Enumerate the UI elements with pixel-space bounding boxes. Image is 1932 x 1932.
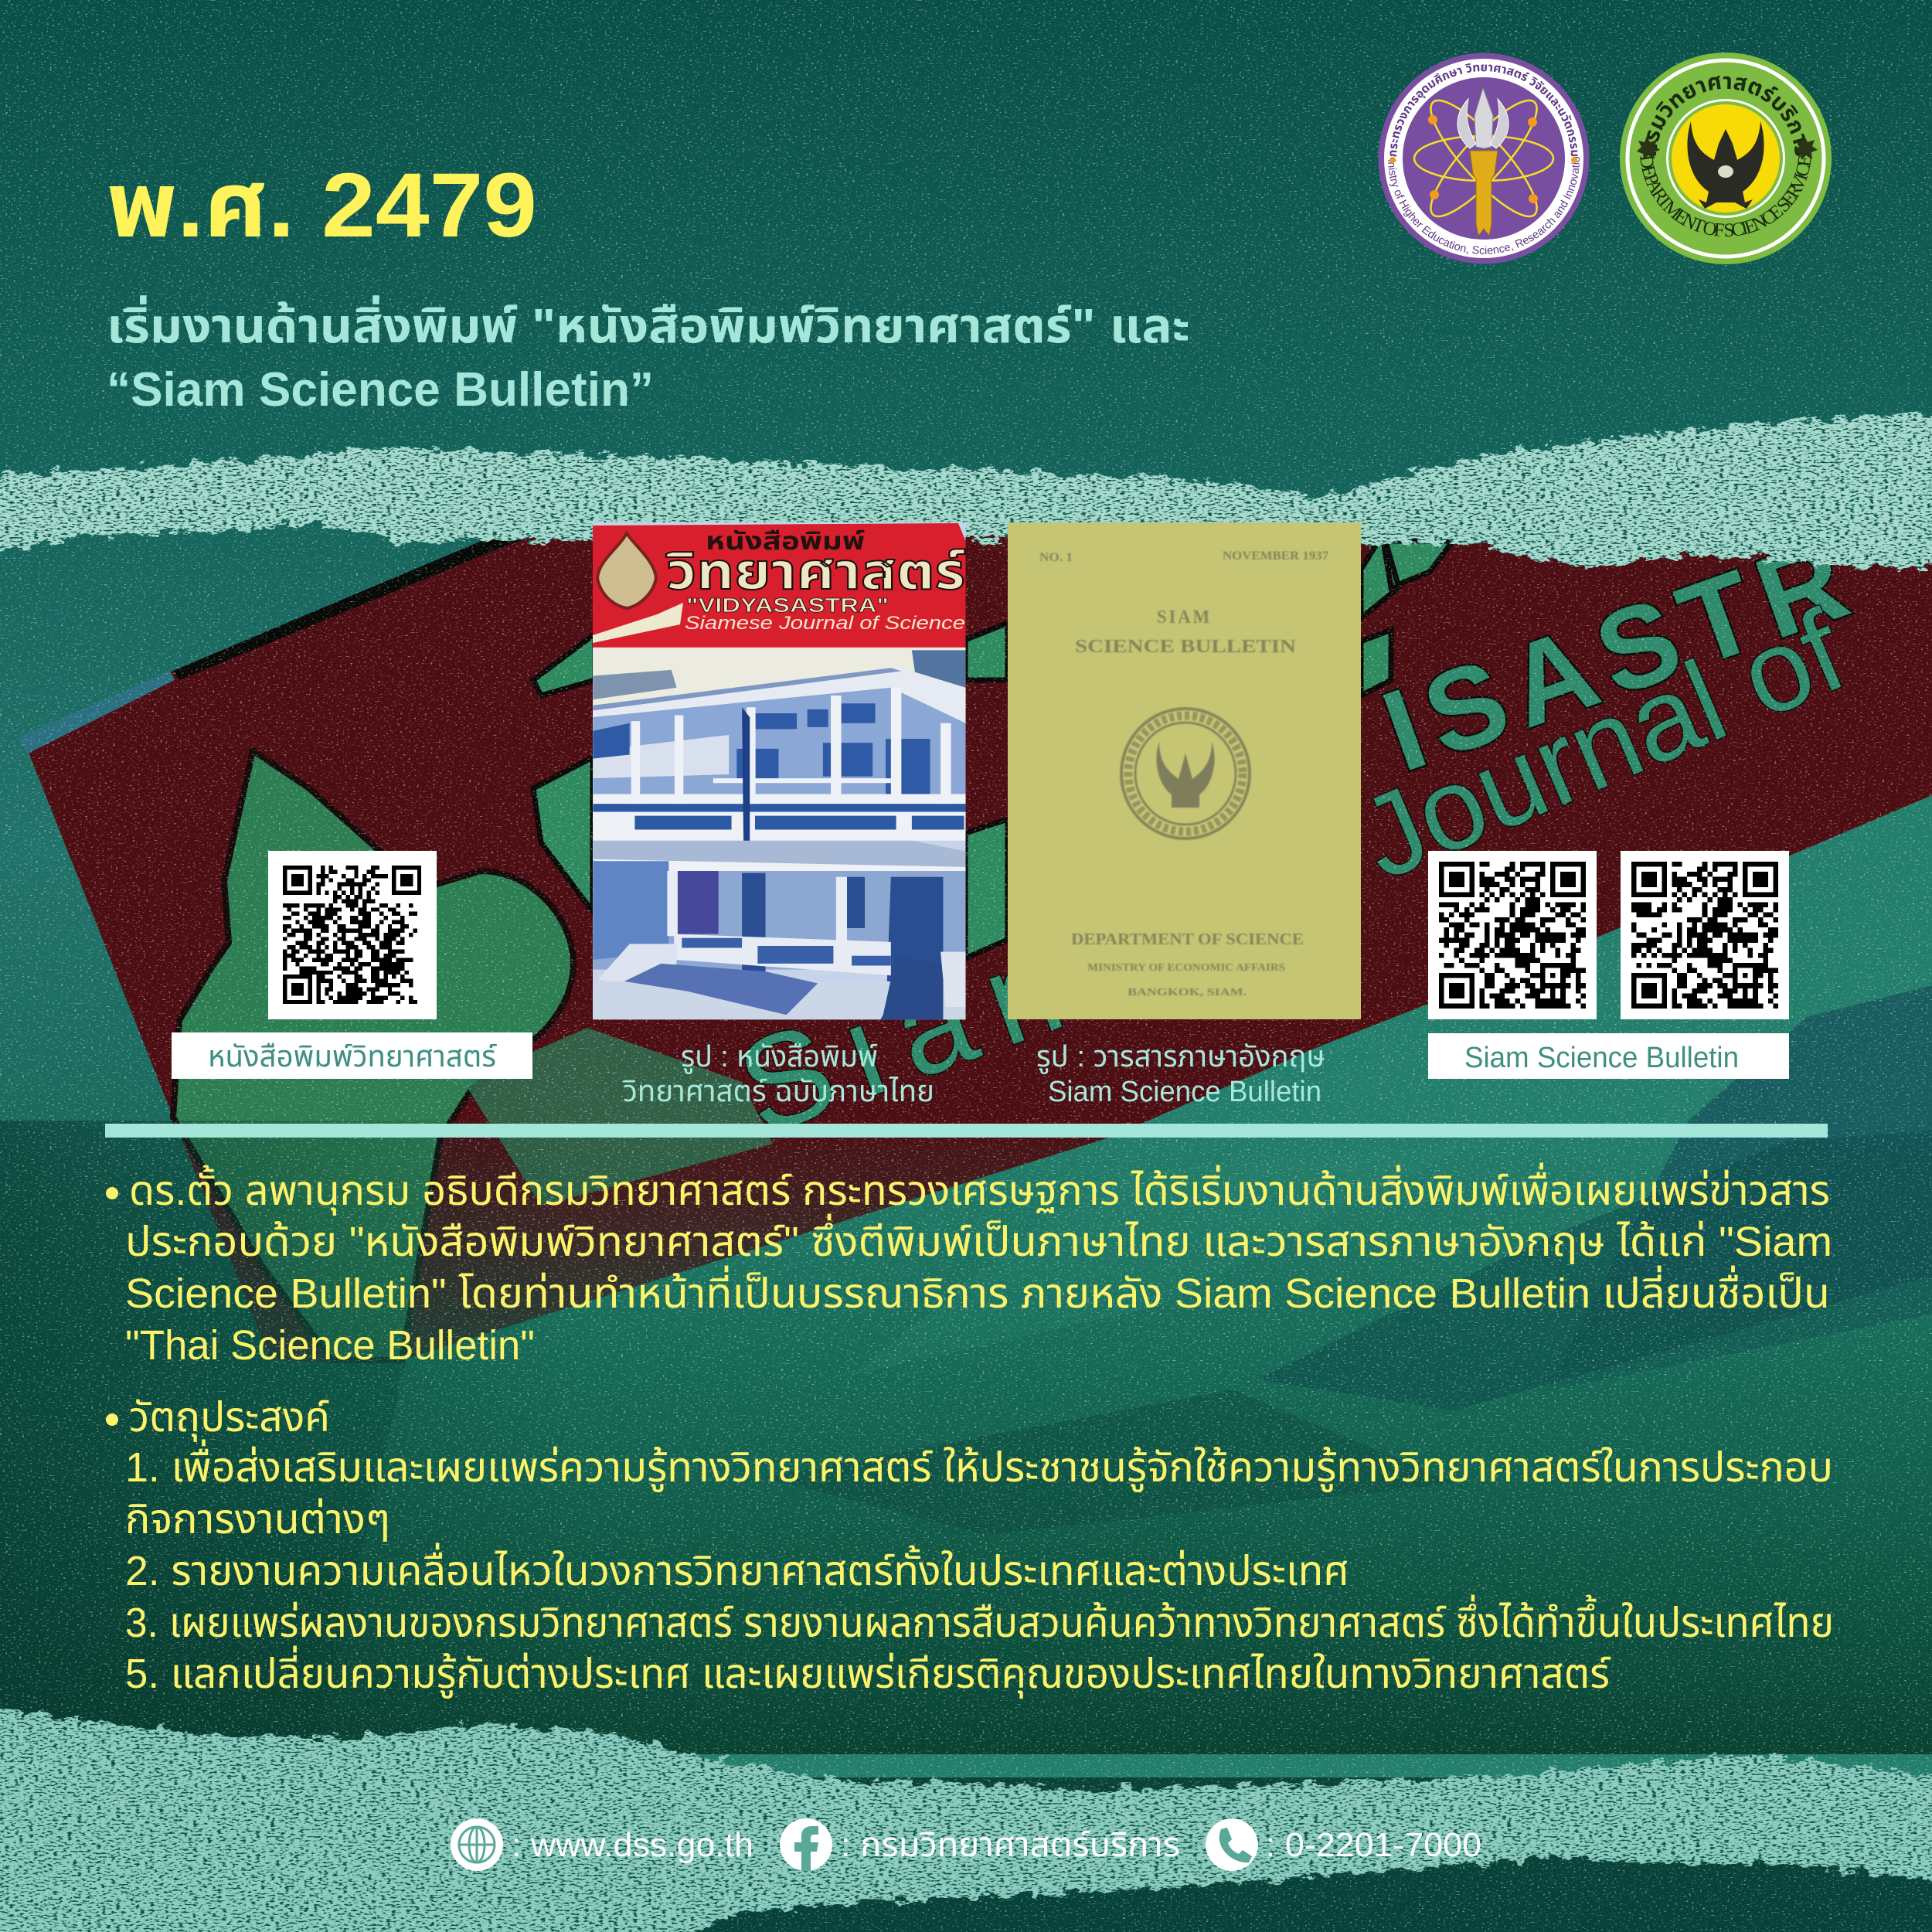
body list: objectives: วัตถุประสงค์ [129, 1394, 330, 1442]
cover seal [1121, 709, 1250, 838]
cover wordmark: ISASTR [1367, 509, 1872, 796]
banner blue edge [17, 671, 175, 753]
caption: bulletin photo [1036, 1041, 1325, 1108]
caption: magazine photo [622, 1041, 934, 1108]
magazine masthead: หนังสือพิมพ์ [706, 527, 865, 555]
subtitle [107, 295, 1190, 417]
faded building planes [1257, 1131, 1932, 1410]
body list: objectives [106, 1394, 1834, 1699]
logo: department of science service: กรมวิทยาศาสตร์บริการ [1647, 76, 1805, 156]
subtitle: เริ่มงานด้านสิ่งพิมพ์ "หนังสือพิมพ์วิทยาศาสตร์" และ [107, 295, 1190, 353]
body list: objectives: 1. เพื่อส่งเสริมและเผยแพร่ความรู้ทางวิทยาศาสตร์ ให้ประชาชนรู้จักใช้ความรู้ทางวิทยาศาสตร์ในการประกอบ [125, 1439, 1833, 1492]
dark red magazine banner [28, 510, 1932, 1362]
caption: magazine photo: รูป : หนังสือพิมพ์ [681, 1041, 878, 1074]
label: magazine [172, 1032, 532, 1079]
body paragraph: publishing history: ดร.ตั้ว ลพานุกรม อธิบดีกรมวิทยาศาสตร์ กระทรวงเศรษฐการ ได้ริเริ่มงานด้านสิ่งพิมพ์เพื่อเผยแพร่ข่าวสาร [129, 1162, 1830, 1216]
cover lower word: Siam [721, 891, 1139, 1163]
cover text: SIAM [1157, 607, 1212, 628]
label: Siam Science Bulletin: Siam Science Bulletin [1464, 1042, 1739, 1074]
divider rule [105, 1124, 1828, 1138]
green letter shapes between the covers [533, 533, 1453, 958]
body list: objectives: 2. รายงานความเคลื่อนไหวในวงการวิทยาศาสตร์ทั้งในประเทศและต่างประเทศ [125, 1543, 1349, 1594]
footer contacts [451, 1818, 1481, 1871]
caption: bulletin photo: รูป : วารสารภาษาอังกฤษ [1036, 1041, 1325, 1074]
footer phone number: : 0-2201-7000 [1266, 1826, 1481, 1864]
body paragraph: publishing history: "Thai Science Bulletin" [125, 1322, 535, 1369]
cover text [1039, 549, 1328, 998]
logo: department of science service [1620, 53, 1832, 264]
title: พ.ศ. 2479 [107, 155, 537, 257]
cover text: DEPARTMENT OF SCIENCE [1071, 930, 1304, 948]
cover text: BANGKOK, SIAM. [1128, 987, 1247, 998]
torn paper strip: lower [0, 1706, 1932, 1932]
logo: ministry: กระทรวงการอุดมศึกษา วิทยาศาสตร์ วิจัยและนวัตกรรม [1389, 63, 1578, 156]
footer website: : www.dss.go.th [512, 1826, 753, 1864]
body paragraph: publishing history: ประกอบด้วย "หนังสือพิมพ์วิทยาศาสตร์" ซึ่งตีพิมพ์เป็นภาษาไทย และวารสารภาษาอังกฤษ ได้แก่ "Siam [125, 1213, 1832, 1265]
green sweep under captions [464, 1028, 773, 1206]
label: magazine: หนังสือพิมพ์วิทยาศาสตร์ [208, 1041, 497, 1073]
cover text: NO. 1 [1039, 551, 1073, 564]
dark building shadow right [1546, 985, 1932, 1391]
magazine masthead: Siamese Journal of Science [685, 613, 965, 634]
torn paper strip: upper [0, 412, 1932, 568]
building illustration [593, 648, 966, 1019]
photo: Thai language science magazine cover [593, 522, 966, 1019]
footer facebook page: : กรมวิทยาศาสตร์บริการ [841, 1826, 1180, 1864]
icon: phone [1206, 1818, 1258, 1871]
body paragraph: publishing history: Science Bulletin" โดยท่านทำหน้าที่เป็นบรรณาธิการ ภายหลัง Siam Science Bulletin เปลี่ยนชื่อเป็น [125, 1265, 1830, 1317]
body list: objectives: กิจการงานต่างๆ [125, 1496, 390, 1543]
subtitle: “Siam Science Bulletin” [107, 363, 654, 417]
icon: facebook [780, 1818, 832, 1871]
green crest on the banner [173, 750, 573, 1360]
cover text: MINISTRY OF ECONOMIC AFFAIRS [1087, 962, 1285, 974]
QR code: magazine [268, 851, 437, 1019]
body paragraph: publishing history [106, 1162, 1832, 1369]
faded bottom overlay [0, 1121, 1932, 1754]
body list: objectives: 5. แลกเปลี่ยนความรู้กับต่างประเทศ และเผยแพร่เกียรติคุณของประเทศไทยในทางวิทยาศาสตร์ [125, 1645, 1611, 1699]
cover text: SCIENCE BULLETIN [1075, 637, 1297, 657]
photo: Siam Science Bulletin cover [1008, 522, 1361, 1019]
magazine masthead: "VIDYASASTRA" [686, 594, 889, 617]
label: Siam Science Bulletin [1428, 1033, 1789, 1079]
green area below the cover [309, 795, 1932, 1777]
caption: magazine photo: วิทยาศาสตร์ ฉบับภาษาไทย [622, 1076, 934, 1108]
magazine masthead: วิทยาศาสตร์ [665, 543, 965, 600]
caption: bulletin photo: Siam Science Bulletin [1048, 1076, 1321, 1108]
logo: department of science service: DEPARTMENT OF SCIENCE SERVICE [1640, 156, 1811, 236]
cover subtitle: Journal of [1342, 585, 1862, 903]
icon: globe [451, 1818, 503, 1871]
banner top shadow [173, 533, 541, 680]
magazine masthead [593, 523, 966, 648]
logo: ministry [1379, 53, 1589, 264]
cover text: NOVEMBER 1937 [1223, 549, 1328, 563]
QR code: Siam Science Bulletin A [1428, 851, 1597, 1019]
body list: objectives: 3. เผยแพร่ผลงานของกรมวิทยาศาสตร์ รายงานผลการสืบสวนค้นคว้าทางวิทยาศาสตร์ ซึ่งได้ทำขึ้นในประเทศไทย [125, 1594, 1834, 1646]
QR code: Siam Science Bulletin B [1621, 851, 1789, 1019]
